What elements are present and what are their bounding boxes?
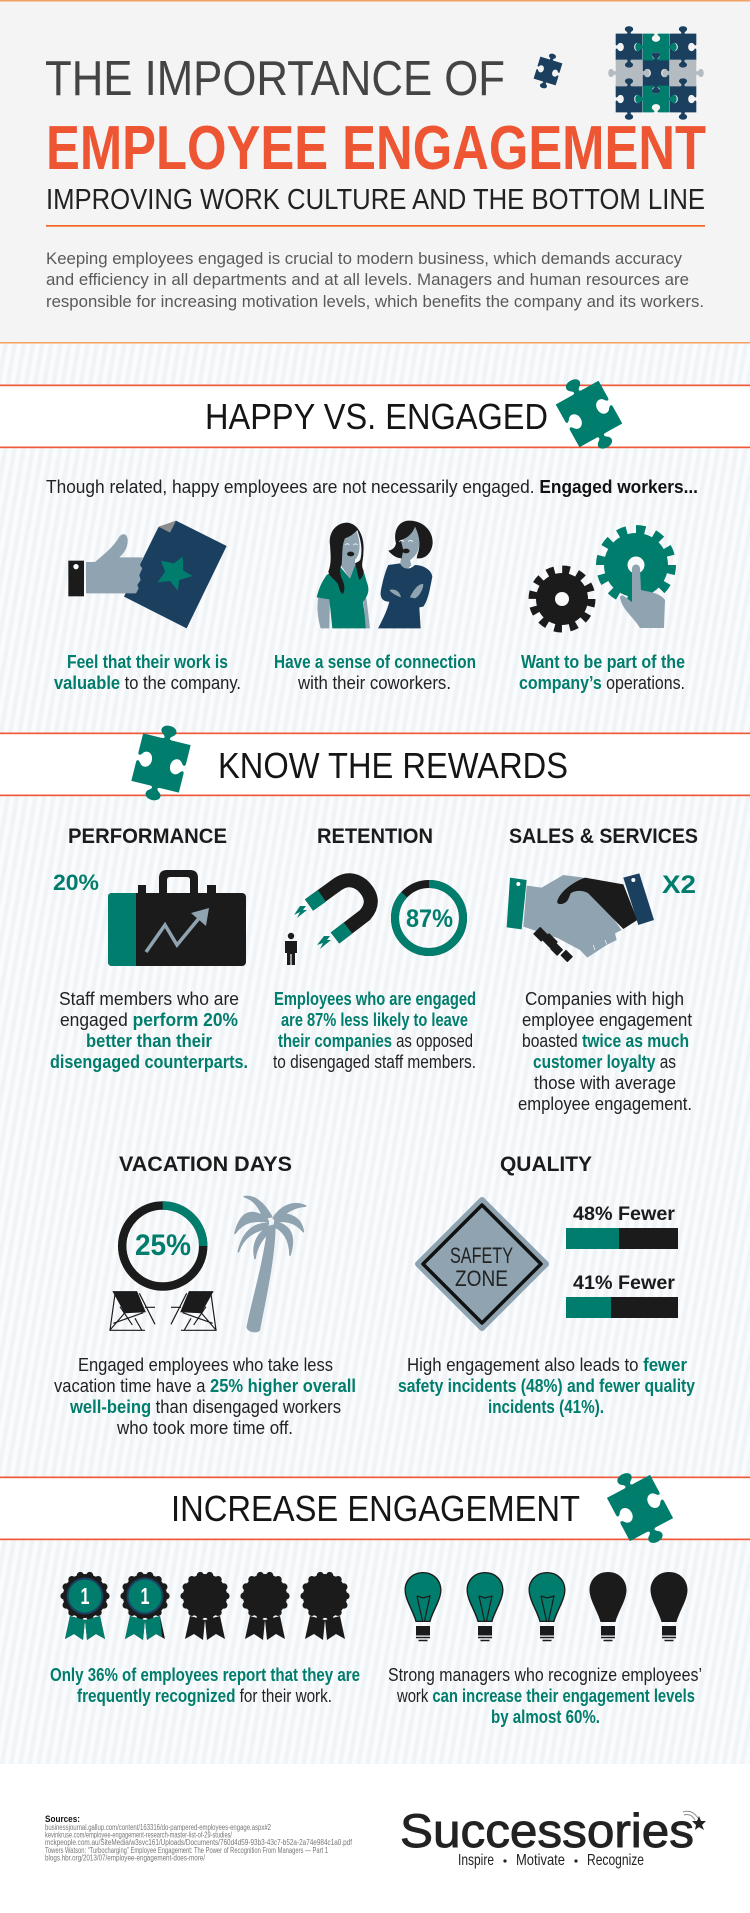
body: performance	[50, 989, 248, 1072]
icon: safety zone sign: SAFETY	[450, 1243, 513, 1268]
body: sales and services: those with average	[534, 1073, 676, 1093]
donut chart: 25%: 25%	[135, 1229, 191, 1262]
body: sales and services: Companies with high	[525, 989, 684, 1009]
title rule	[46, 225, 705, 227]
body: recognition: Only 36% of employees report that they are	[50, 1665, 360, 1685]
caption: valuable work	[54, 652, 241, 693]
body: sales and services	[518, 989, 692, 1114]
body: performance: engaged perform 20%	[60, 1010, 238, 1030]
body: quality	[398, 1355, 695, 1417]
body: performance: Staff members who are	[59, 989, 239, 1009]
body: retention: their companies as opposed	[278, 1031, 473, 1051]
heading: Sales and Services: SALES & SERVICES	[509, 825, 698, 848]
body: quality: safety incidents (48%) and fewer quality	[398, 1376, 695, 1396]
bar: 48% fewer: 48% Fewer	[573, 1204, 676, 1225]
intro paragraph: responsible for increasing motivation levels, which benefits the company and its workers.	[46, 292, 704, 311]
intro paragraph	[46, 249, 704, 311]
logo: Successories: Recognize	[587, 1852, 644, 1869]
section band: Know the Rewards: KNOW THE REWARDS	[218, 745, 568, 786]
icon row: five ribbons: 1	[140, 1583, 150, 1609]
caption: connection: Have a sense of connection	[274, 652, 476, 672]
caption: connection: with their coworkers.	[297, 673, 451, 693]
top accent line	[0, 0, 750, 2]
donut chart: 25%	[122, 1206, 203, 1286]
body: managers: Strong managers who recognize employees’	[388, 1665, 702, 1685]
header panel background	[0, 0, 750, 343]
caption: valuable work: valuable to the company.	[54, 673, 241, 693]
icon: puzzle grid	[608, 26, 704, 120]
icon: magnet attracting person	[285, 880, 371, 965]
body: quality: High engagement also leads to fewer	[407, 1355, 687, 1375]
donut chart: 87%	[395, 884, 463, 952]
sources: blogs.hbr.org/2013/07/employee-engagement-does-more/	[45, 1854, 206, 1862]
icon: safety zone sign	[418, 1200, 546, 1328]
intro sentence: Though related, happy employees are not necessarily engaged. Engaged workers...	[46, 477, 698, 497]
body: managers: work can increase their engagement levels	[396, 1686, 695, 1706]
section band: Know the Rewards	[0, 720, 750, 806]
icon: two women talking	[317, 521, 433, 628]
sources: mckpeople.com.au/SiteMedia/w3svc161/Uploads/Documents/760d4d59-93b3-43c7-b52a-2a74e984c1a0.pdf	[45, 1838, 353, 1847]
icon row: five ribbons	[60, 1572, 350, 1640]
heading: Retention: RETENTION	[317, 825, 433, 848]
caption: valuable work: Feel that their work is	[67, 652, 228, 672]
body: retention: Employees who are engaged	[274, 989, 476, 1009]
header divider	[0, 342, 750, 344]
icon: briefcase with rising chart	[108, 870, 246, 966]
icon: thumbs up with folder	[68, 521, 227, 628]
icon row: five ribbons: 1	[80, 1583, 90, 1609]
logo: Successories: Successories	[400, 1804, 694, 1857]
icon row: five light bulbs	[404, 1572, 688, 1640]
body: vacation days: vacation time have a 25% higher overall	[54, 1376, 356, 1396]
sources: businessjournal.gallup.com/content/163316/do-pampered-employees-engage.aspx#2	[45, 1823, 271, 1832]
title: The Importance Of: THE IMPORTANCE OF	[45, 52, 505, 106]
body: recognition	[50, 1665, 360, 1706]
icon: safety zone sign: ZONE	[455, 1266, 508, 1291]
body: recognition: frequently recognized for their work.	[77, 1686, 332, 1706]
bar: 48% fewer	[566, 1204, 678, 1249]
icon: beach chairs	[109, 1292, 217, 1330]
section band: Increase Engagement	[0, 1463, 750, 1553]
donut chart: 87%: 87%	[406, 905, 453, 933]
logo: Successories: Motivate	[516, 1852, 565, 1869]
heading: Performance: PERFORMANCE	[68, 825, 227, 848]
sources	[45, 1814, 353, 1862]
body: vacation days: Engaged employees who take less	[78, 1355, 333, 1375]
caption: part of operations: company’s operations.	[519, 673, 685, 693]
logo: Successories: Inspire	[458, 1852, 494, 1869]
section band: Happy vs. Engaged: HAPPY VS. ENGAGED	[205, 396, 548, 437]
footer panel	[0, 1764, 750, 1913]
sources: Sources:	[45, 1814, 80, 1824]
icon: handshake	[507, 873, 654, 962]
caption: connection	[274, 652, 476, 693]
body: vacation days: well-being than disengaged workers	[69, 1397, 341, 1417]
icon: gears with hand	[533, 530, 671, 628]
body: vacation days	[54, 1355, 356, 1438]
section band: Increase Engagement: INCREASE ENGAGEMENT	[171, 1488, 580, 1529]
caption: part of operations: Want to be part of the	[521, 652, 685, 672]
body: sales and services: employee engagement.	[518, 1094, 692, 1114]
body: managers: by almost 60%.	[491, 1707, 600, 1727]
bar: 41% fewer: 41% Fewer	[573, 1273, 676, 1294]
body: performance: better than their	[86, 1031, 212, 1051]
section band: Happy vs. Engaged	[0, 369, 750, 459]
body: quality: incidents (41%).	[488, 1397, 604, 1417]
sources: kevinkruse.com/employee-engagement-research-master-list-of-29-studies/	[45, 1830, 233, 1840]
stat: 20%: 20%	[53, 870, 99, 895]
body: retention: to disengaged staff members.	[273, 1052, 476, 1072]
sources: Towers Watson: “Turbocharging” Employee Engagement: The Power of Recognition From Managers — Part 1	[45, 1846, 328, 1855]
intro paragraph: and efficiency in all departments and at all levels. Managers and human resources are	[46, 270, 689, 289]
body: performance: disengaged counterparts.	[50, 1052, 248, 1072]
heading: Quality: QUALITY	[500, 1153, 592, 1176]
body: retention	[273, 989, 476, 1072]
heading: Vacation Days: VACATION DAYS	[119, 1153, 292, 1176]
intro paragraph: Keeping employees engaged is crucial to modern business, which demands accuracy	[46, 249, 682, 268]
body: managers	[388, 1665, 702, 1727]
stat: x2: X2	[662, 871, 696, 899]
body: sales and services: employee engagement	[522, 1010, 692, 1030]
body: sales and services: customer loyalty as	[533, 1052, 676, 1072]
bar: 41% fewer	[566, 1273, 678, 1318]
striped body background	[0, 343, 750, 1764]
body: sales and services: boasted twice as much	[522, 1031, 689, 1051]
caption: part of operations	[519, 652, 685, 693]
body: vacation days: who took more time off.	[116, 1418, 293, 1438]
body: retention: are 87% less likely to leave	[281, 1010, 468, 1030]
icon: palm tree	[235, 1196, 306, 1331]
icon: single puzzle piece	[532, 50, 564, 92]
